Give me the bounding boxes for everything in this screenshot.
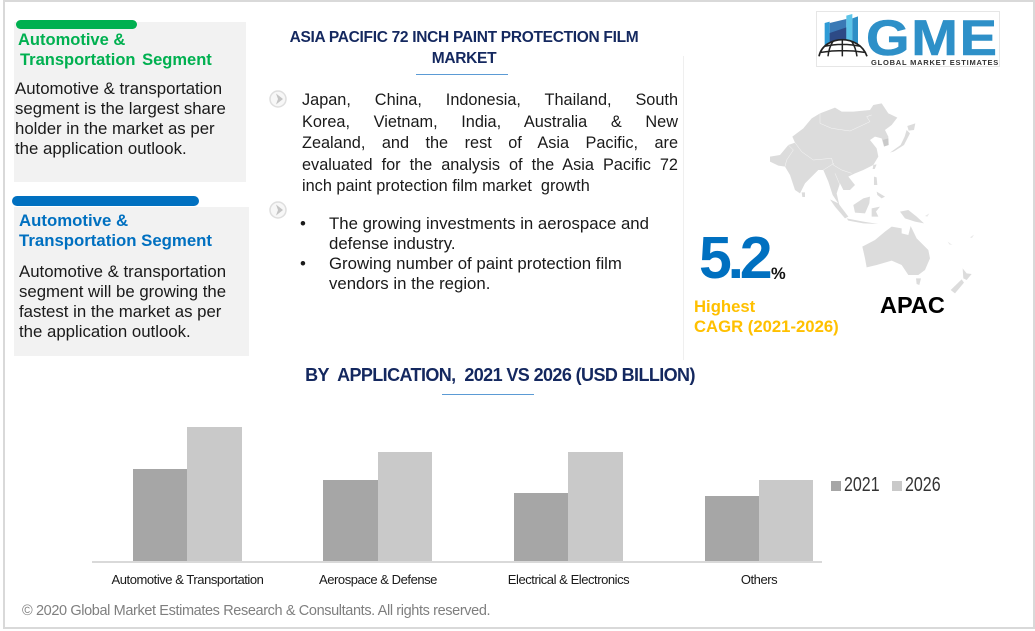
label: APAC: APAC xyxy=(880,292,945,318)
line 2: Korea, Vietnam, India, Australia & New xyxy=(302,112,678,130)
text: fastest segment: the application outlook. xyxy=(19,322,191,341)
heading: fastest segment: Transportation Segment xyxy=(19,231,212,250)
category label: Automotive & Transportation: Automotive & Transportation xyxy=(112,572,263,587)
legend label 2026: 2026 xyxy=(905,474,941,496)
line 5: inch paint protection film market growth xyxy=(302,177,590,195)
heading: largest segment xyxy=(18,31,212,69)
label: highest CAGR: Highest xyxy=(694,297,755,316)
heading: largest segment: Transportation Segment xyxy=(20,51,212,69)
icon: chevron bullet 2 xyxy=(269,201,287,219)
bar: Aerospace 2021 xyxy=(323,480,378,562)
chart title: BY APPLICATION, 2021 VS 2026 (USD BILLION) xyxy=(305,365,695,385)
driver 2 xyxy=(329,254,622,293)
chart title underline xyxy=(442,394,534,395)
footer copyright: © 2020 Global Market Estimates Research & Consultants. All rights reserved. xyxy=(22,603,490,619)
heading: fastest segment xyxy=(19,211,212,250)
logo letters: GME xyxy=(866,11,999,66)
driver 1: defense industry. xyxy=(329,234,456,253)
driver 2: vendors in the region. xyxy=(329,274,490,293)
panel: fastest segment xyxy=(12,196,249,356)
map: Asia Pacific xyxy=(770,104,974,294)
icon: bars and globe xyxy=(818,14,868,57)
title: ASIA PACIFIC 72 INCH PAINT PROTECTION FILM xyxy=(290,29,638,46)
text: fastest segment: Automotive & transportation xyxy=(19,262,226,281)
green accent bar xyxy=(16,20,137,29)
driver 1: The growing investments in aerospace and xyxy=(329,214,649,233)
bar: Others 2026 xyxy=(759,480,813,562)
text: fastest segment: fastest in the market as per xyxy=(19,302,221,321)
bar chart xyxy=(92,427,941,563)
divider: map panel edge xyxy=(683,56,684,360)
stat: CAGR xyxy=(694,225,839,336)
logo tagline: GLOBAL MARKET ESTIMATES xyxy=(871,58,999,67)
legend label 2021: 2021 xyxy=(844,474,880,496)
panel background xyxy=(14,22,246,182)
bullet dot 1: • xyxy=(300,214,306,233)
text: fastest segment: segment will be growing the xyxy=(19,282,226,301)
text: largest segment: the application outlook. xyxy=(15,139,187,158)
line 3: Zealand, and the rest of Asia Pacific, are xyxy=(302,134,678,152)
percent sign: % xyxy=(771,265,786,283)
line 1: Japan, China, Indonesia, Thailand, South xyxy=(302,91,678,109)
heading: largest segment: Automotive & xyxy=(18,31,125,49)
logo: GME xyxy=(816,11,1000,67)
legend xyxy=(831,474,941,496)
text: largest segment: Automotive & transportation xyxy=(15,79,222,98)
bar: Electrical 2026 xyxy=(568,452,623,562)
value: 5.2: 5.2 xyxy=(699,225,768,291)
text: largest segment: segment is the largest share xyxy=(15,99,226,118)
text: growth drivers xyxy=(300,214,649,293)
text: largest segment: holder in the market as per xyxy=(15,119,215,138)
text: fastest segment xyxy=(19,262,226,341)
category label: Others: Others xyxy=(741,572,777,587)
category label: Aerospace & Defense: Aerospace & Defense xyxy=(319,572,437,587)
panel: largest segment xyxy=(14,20,246,182)
legend swatch 2026 xyxy=(892,481,902,491)
driver 2: Growing number of paint protection film xyxy=(329,254,622,273)
text: countries evaluated xyxy=(302,91,678,195)
text: largest segment xyxy=(15,79,226,158)
category label: Electrical & Electronics: Electrical & Electronics xyxy=(508,572,629,587)
blue accent bar xyxy=(12,196,199,206)
bar: Others 2021 xyxy=(705,496,759,562)
line 4: evaluated for the analysis of the Asia Pacific 72 xyxy=(302,156,678,174)
label: highest CAGR xyxy=(694,297,839,336)
legend swatch 2021 xyxy=(831,481,841,491)
panel background xyxy=(14,207,249,356)
bar: Electrical 2021 xyxy=(514,493,568,562)
bar: Automotive 2026 xyxy=(187,427,242,562)
icon: chevron bullet 1 xyxy=(269,90,287,108)
bar: Aerospace 2026 xyxy=(378,452,432,562)
label: highest CAGR: CAGR (2021-2026) xyxy=(694,317,839,336)
driver 1 xyxy=(329,214,649,253)
title: MARKET xyxy=(432,50,496,67)
bar: Automotive 2021 xyxy=(133,469,187,562)
bullet dot 2: • xyxy=(300,254,306,273)
title xyxy=(290,29,638,67)
chart axis xyxy=(92,561,822,563)
title underline xyxy=(416,74,508,75)
heading: fastest segment: Automotive & xyxy=(19,211,128,230)
